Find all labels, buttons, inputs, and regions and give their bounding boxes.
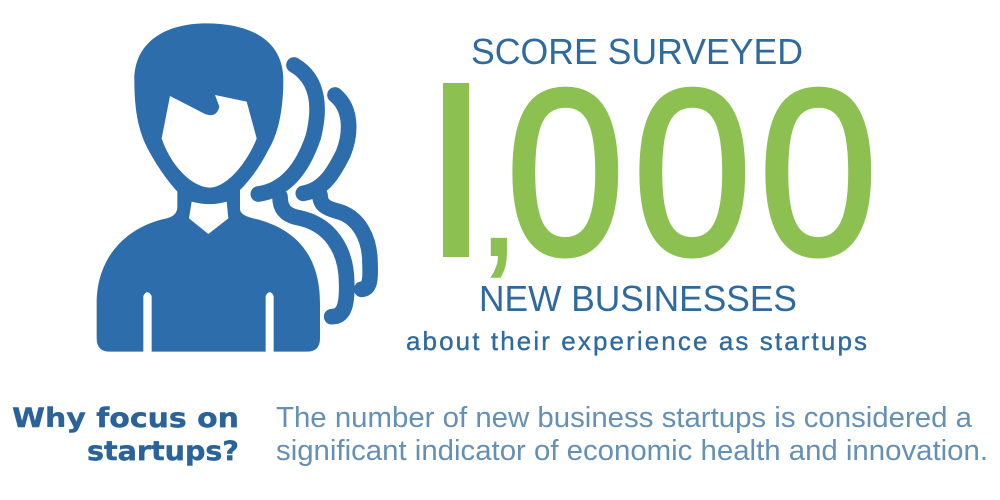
body text: startups explanation: significant indicator of economic health and innovation. [276,435,988,467]
subheading: about their experience: about their experience as startups [406,326,867,356]
big number: 1,000: 0 [759,40,878,304]
big number: 1,000: 0 [633,40,752,304]
icon: echo outline 2 [303,95,370,289]
icon: echo outline 1 [258,65,347,317]
body text: startups explanation: The number of new business startups is considered a [276,402,973,434]
subheading: NEW BUSINESSES: NEW BUSINESSES [479,278,797,319]
question: why focus on startups: startups? [87,436,239,467]
icon: main person silhouette [97,23,320,353]
icon: person with echo silhouettes [97,23,370,353]
big number: 1,000 [443,83,872,278]
big number: 1,000: 0 [506,40,625,304]
heading: SCORE SURVEYED: SCORE SURVEYED [471,31,803,72]
big number: 1,000: , [475,103,522,293]
question: why focus on startups [12,403,239,467]
body text: startups explanation [276,402,988,467]
question: why focus on startups: Why focus on [12,403,239,434]
big number: 1,000: 1 [408,35,544,309]
